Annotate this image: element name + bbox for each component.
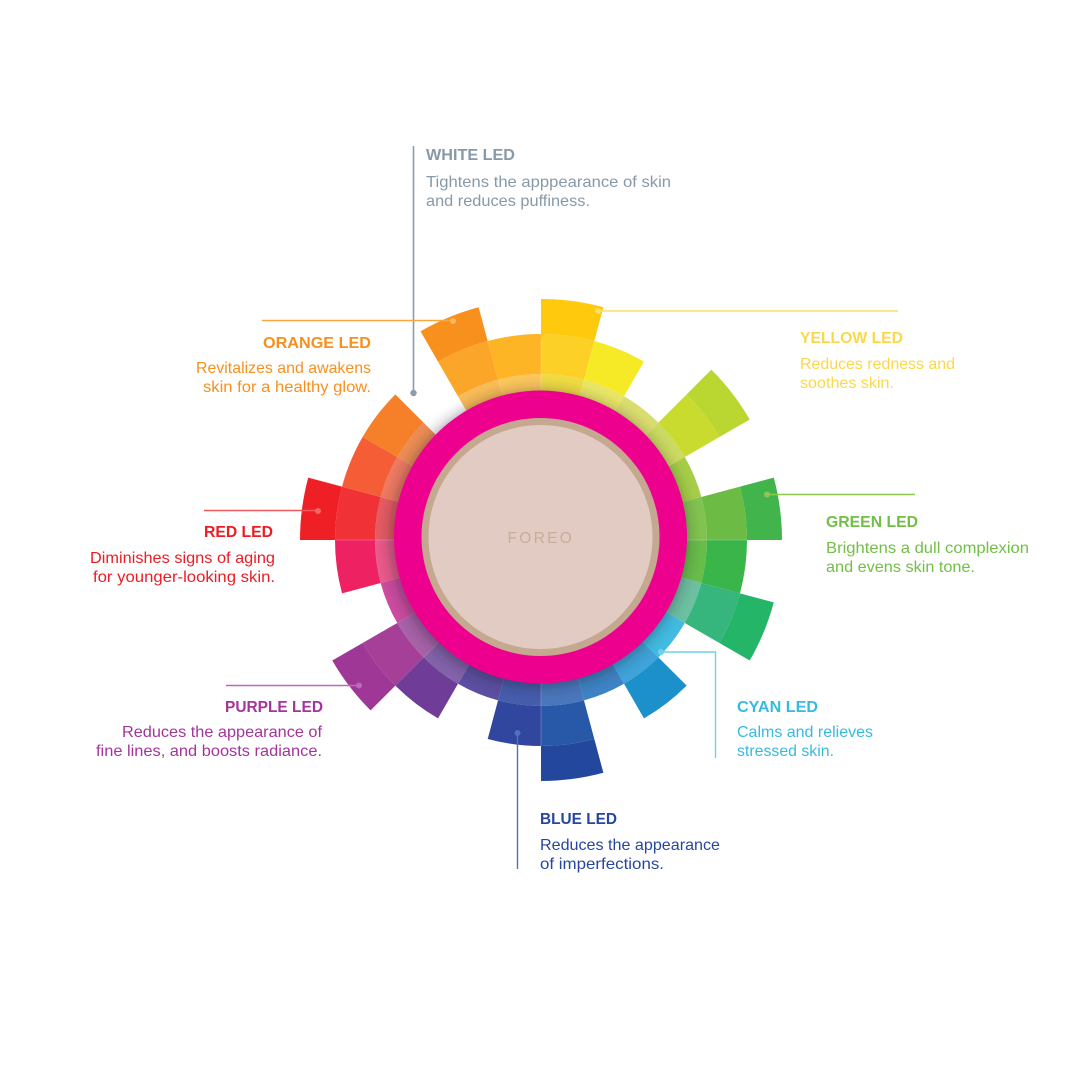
- text: blue LED: Reduces the appearance: [540, 837, 720, 854]
- callout: red LED: [90, 508, 321, 586]
- callout: cyan LED: [658, 649, 873, 760]
- text: purple LED: fine lines, and boosts radiance.: [96, 743, 322, 760]
- text: yellow LED: Reduces redness and: [800, 356, 955, 373]
- logo: FOREO: FOREO: [508, 530, 574, 547]
- text: red LED: for younger-looking skin.: [93, 569, 275, 586]
- leader line: yellow: [595, 308, 898, 314]
- text: blue LED: [540, 811, 720, 873]
- leader line: purple: [226, 682, 362, 688]
- text: white LED: WHITE LED: [426, 147, 515, 164]
- callout: purple LED: [96, 682, 362, 760]
- text: cyan LED: [737, 699, 873, 760]
- text: white LED: and reduces puffiness.: [426, 193, 590, 210]
- text: white LED: [426, 147, 671, 210]
- text: red LED: [90, 524, 275, 586]
- leader line: orange: [262, 318, 456, 324]
- text: yellow LED: soothes skin.: [800, 375, 894, 392]
- text: cyan LED: stressed skin.: [737, 743, 834, 760]
- callout: white LED: [410, 146, 671, 396]
- leader line: red: [204, 508, 321, 514]
- text: green LED: GREEN LED: [826, 514, 918, 531]
- leader line: white: [410, 146, 417, 396]
- outer band segments: [300, 299, 790, 789]
- text: cyan LED: Calms and relieves: [737, 724, 873, 741]
- text: cyan LED: CYAN LED: [737, 699, 818, 716]
- device: face: [428, 425, 652, 649]
- middle band segments: [328, 327, 754, 753]
- text: orange LED: skin for a healthy glow.: [203, 379, 371, 396]
- text: purple LED: PURPLE LED: [225, 699, 323, 716]
- led colour wheel: [300, 299, 790, 789]
- callout: orange LED: [196, 318, 456, 396]
- text: red LED: RED LED: [204, 524, 273, 541]
- leader line: green: [764, 492, 915, 498]
- leader line: blue: [514, 730, 520, 869]
- text: orange LED: Revitalizes and awakens: [196, 360, 371, 377]
- text: orange LED: [196, 335, 371, 396]
- text: purple LED: Reduces the appearance of: [122, 724, 323, 741]
- text: red LED: Diminishes signs of aging: [90, 550, 275, 567]
- text: blue LED: of imperfections.: [540, 856, 664, 873]
- device: tan rim: [422, 418, 660, 656]
- text: orange LED: ORANGE LED: [263, 335, 371, 352]
- callout: yellow LED: [595, 308, 955, 392]
- callout: blue LED: [514, 730, 720, 873]
- text: white LED: Tightens the apppearance of skin: [426, 174, 671, 191]
- ring shadow: [391, 391, 687, 687]
- callout: green LED: [764, 492, 1029, 576]
- text: yellow LED: [800, 330, 955, 392]
- device: pink ring: [394, 390, 687, 684]
- inner band segments: [370, 369, 712, 711]
- text: purple LED: [96, 699, 323, 760]
- text: green LED: [826, 514, 1029, 576]
- text: yellow LED: YELLOW LED: [800, 330, 903, 347]
- text: green LED: Brightens a dull complexion: [826, 540, 1029, 557]
- text: green LED: and evens skin tone.: [826, 559, 975, 576]
- text: blue LED: BLUE LED: [540, 811, 617, 828]
- leader line: cyan: [658, 649, 716, 758]
